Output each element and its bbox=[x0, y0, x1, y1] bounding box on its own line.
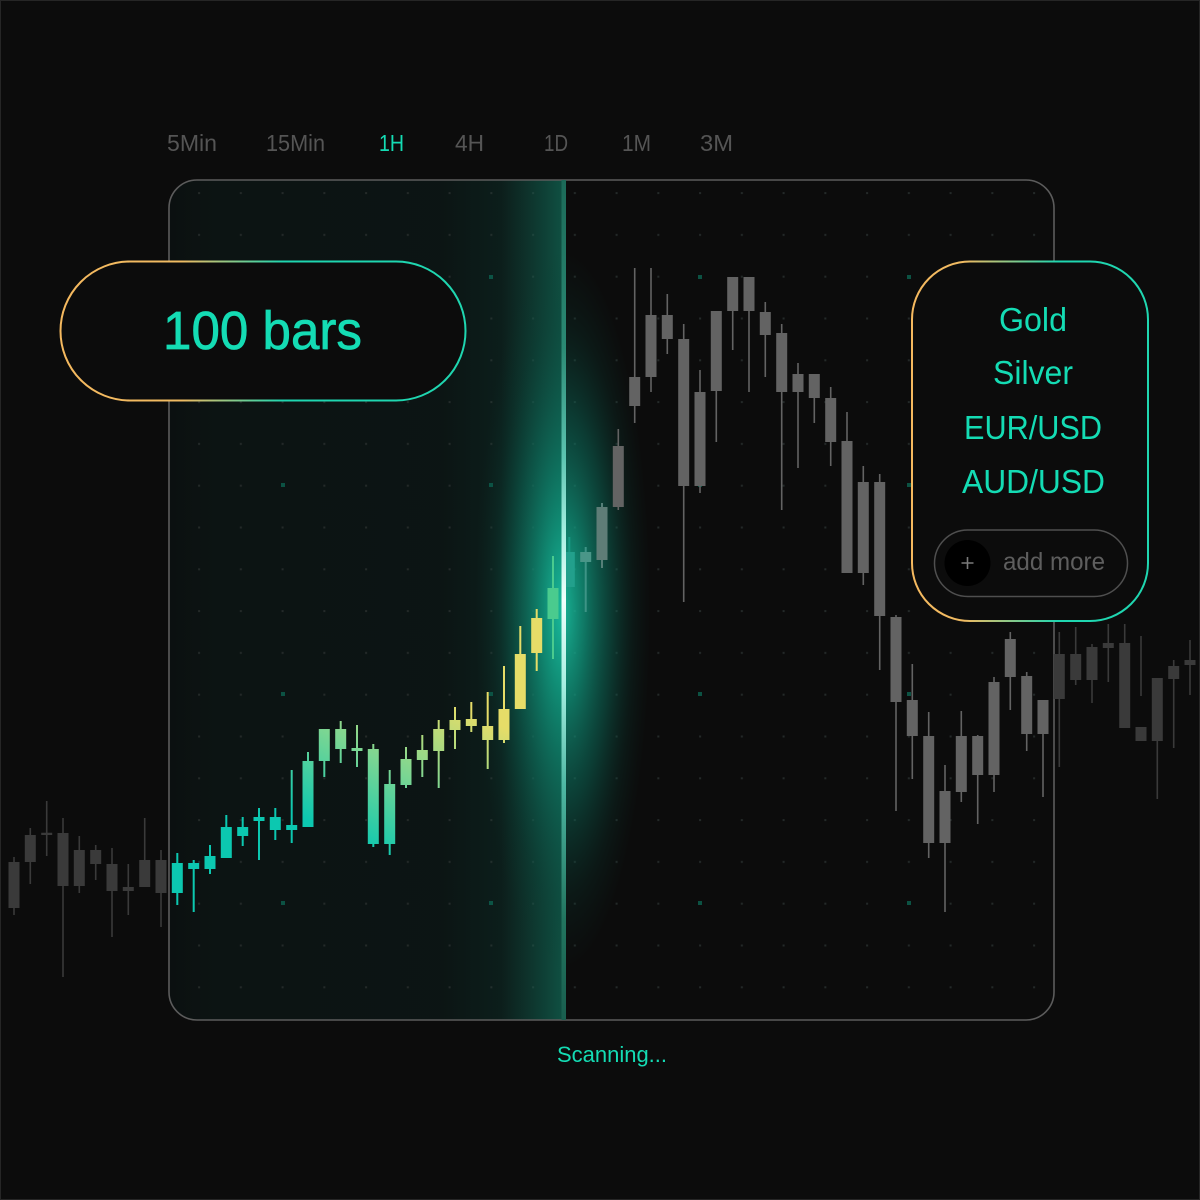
dim candles left of panel bbox=[14, 801, 161, 977]
panel border bbox=[169, 180, 1054, 1020]
button outline bbox=[934, 530, 1128, 596]
instrument: Silver: Silver bbox=[993, 354, 1073, 391]
instrument: EUR/USD: EUR/USD bbox=[964, 409, 1102, 446]
instrument: AUD/USD: AUD/USD bbox=[962, 463, 1105, 500]
tab: 15Min: 15Min bbox=[266, 130, 325, 156]
callout pill bbox=[60, 262, 466, 400]
panel: instruments list bbox=[912, 262, 1148, 621]
instrument: Gold: Gold bbox=[999, 301, 1067, 338]
candles inside glow bbox=[553, 503, 602, 659]
tab: 3M: 3M bbox=[700, 130, 733, 156]
candlestick chart bbox=[14, 268, 1190, 977]
dim candles right of panel bbox=[1059, 624, 1190, 799]
scan glow bbox=[480, 180, 638, 1020]
plus icon bbox=[944, 540, 990, 586]
list card bbox=[912, 262, 1148, 621]
tab: 1H active: 1H bbox=[379, 130, 404, 156]
grey candles right of scan line bbox=[618, 268, 1043, 912]
tab: 4H: 4H bbox=[455, 130, 484, 156]
scan line bbox=[562, 180, 566, 1020]
dot grid bbox=[178, 172, 1055, 1008]
tab: 1M: 1M bbox=[622, 130, 651, 156]
tab: 5Min: 5Min bbox=[167, 130, 217, 156]
tab: 1D: 1D bbox=[544, 130, 568, 156]
scanned tint bbox=[222, 181, 502, 1019]
gradient candles inside scanned area bbox=[177, 609, 537, 912]
highlighted grid dots bbox=[281, 275, 911, 905]
button label: add more bbox=[1003, 548, 1105, 576]
timeframe tabs bbox=[167, 130, 733, 156]
callout label: 100 bars bbox=[163, 301, 362, 361]
add more button bbox=[934, 530, 1128, 596]
panel: scanned chart area bbox=[169, 172, 1055, 1020]
callout: 100 bars bbox=[60, 262, 466, 400]
status: scanning: Scanning... bbox=[557, 1042, 667, 1067]
